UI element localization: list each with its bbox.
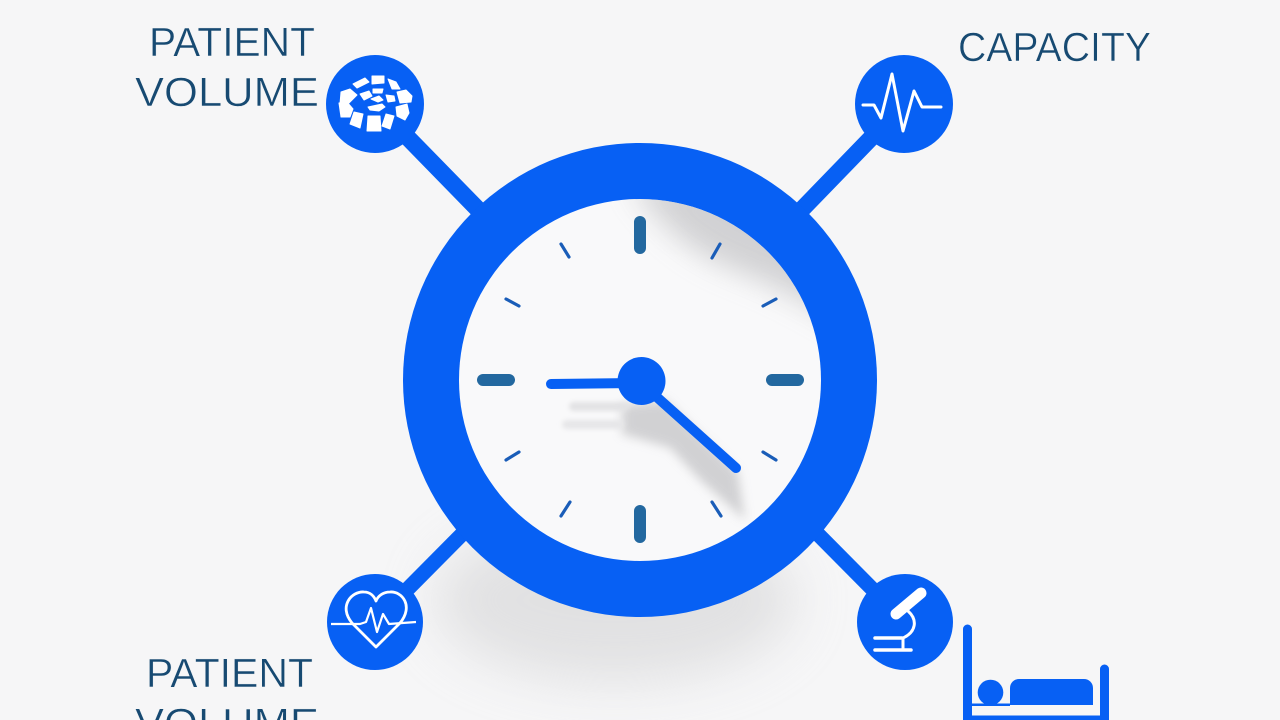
hour ticks [483, 222, 798, 537]
node: patient volume top [326, 55, 424, 153]
face shadows [562, 199, 810, 518]
clock ring [403, 143, 877, 617]
icon: heart with pulse [331, 592, 416, 647]
label: capacity: CAPACITY [958, 24, 1151, 70]
label: patient volume top: PATIENT [149, 19, 315, 65]
connector: top left [375, 104, 500, 232]
node: capacity [855, 55, 953, 153]
clock face [459, 199, 821, 561]
icon: microscope [875, 593, 921, 650]
clock hub [618, 357, 666, 405]
clock [403, 143, 877, 617]
node: patient volume bottom [327, 574, 423, 670]
hour hand [640, 382, 736, 468]
node: microscope [857, 574, 953, 670]
label: patient volume bottom: PATIENT [146, 650, 313, 696]
circle [857, 574, 953, 670]
label: patient volume top: VOLUME [135, 69, 319, 115]
circle [327, 574, 423, 670]
icon: heartbeat pulse [863, 74, 941, 131]
minor ticks [506, 244, 776, 516]
icon: crowd of patients [339, 76, 412, 131]
minute hand [551, 383, 640, 384]
clock drop shadow [435, 518, 795, 682]
circle [326, 55, 424, 153]
connector: top right [780, 104, 904, 232]
connector: bottom right [790, 506, 905, 622]
circle [855, 55, 953, 153]
icon: hospital bed [963, 625, 1109, 720]
connector: bottom left [375, 506, 490, 622]
